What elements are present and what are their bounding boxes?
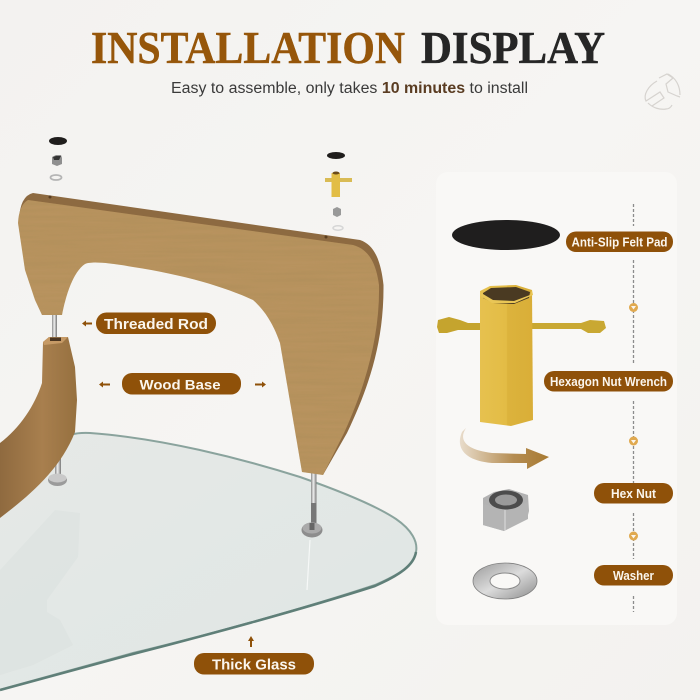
arrow: threaded rod	[82, 320, 92, 326]
wood base: screw holes	[48, 196, 328, 238]
threaded rod: left upper	[52, 313, 57, 341]
icon: hex nut	[483, 489, 529, 531]
label: hex nut	[594, 483, 673, 504]
glass reflection of leg	[0, 510, 80, 675]
label: wood base: Wood Base	[140, 376, 221, 392]
arrow: thick glass	[248, 636, 254, 647]
label: threaded rod	[96, 312, 216, 334]
label: thick glass: Thick Glass	[212, 658, 296, 674]
wood base: upper arch face	[18, 200, 379, 475]
icon: hexagon nut wrench	[437, 285, 606, 426]
label: anti-slip felt pad	[566, 232, 673, 252]
panel: glass tabletop	[0, 433, 416, 691]
wood base: upper arch back edge	[19, 193, 384, 475]
title	[91, 22, 605, 73]
label: wood base	[122, 373, 241, 394]
threaded rod and base: right	[302, 473, 322, 538]
info panel	[436, 172, 677, 625]
label: threaded rod: Threaded Rod	[104, 317, 208, 333]
exploded parts: right stack	[325, 152, 352, 230]
arrow: wood base right	[255, 382, 266, 388]
arrow: wood base left	[99, 382, 110, 388]
label: washer	[594, 565, 673, 586]
icon: washer	[473, 563, 537, 599]
label: anti-slip felt pad: Anti-Slip Felt Pad	[572, 236, 668, 250]
title: INSTALLATION	[91, 22, 405, 73]
label: hexagon nut wrench: Hexagon Nut Wrench	[550, 375, 667, 389]
icon: rotation arrow	[460, 428, 549, 469]
dashed connector	[632, 204, 634, 612]
front edge of glass	[0, 552, 416, 690]
wood base: lower left leg	[0, 337, 77, 518]
connector markers	[629, 303, 638, 540]
subtitle: Easy to assemble, only takes 10 minutes to install	[171, 80, 528, 97]
title: DISPLAY	[421, 22, 605, 73]
icon: wrench outline	[645, 74, 680, 109]
exploded parts: left stack	[49, 137, 67, 180]
label: hex nut: Hex Nut	[611, 487, 657, 501]
label: washer: Washer	[613, 569, 654, 583]
icon: felt pad	[452, 220, 560, 250]
rod reflection in glass	[307, 540, 310, 590]
label: hexagon nut wrench	[544, 371, 673, 392]
label: thick glass	[194, 653, 314, 674]
threaded rod and base: left lower	[48, 450, 67, 486]
